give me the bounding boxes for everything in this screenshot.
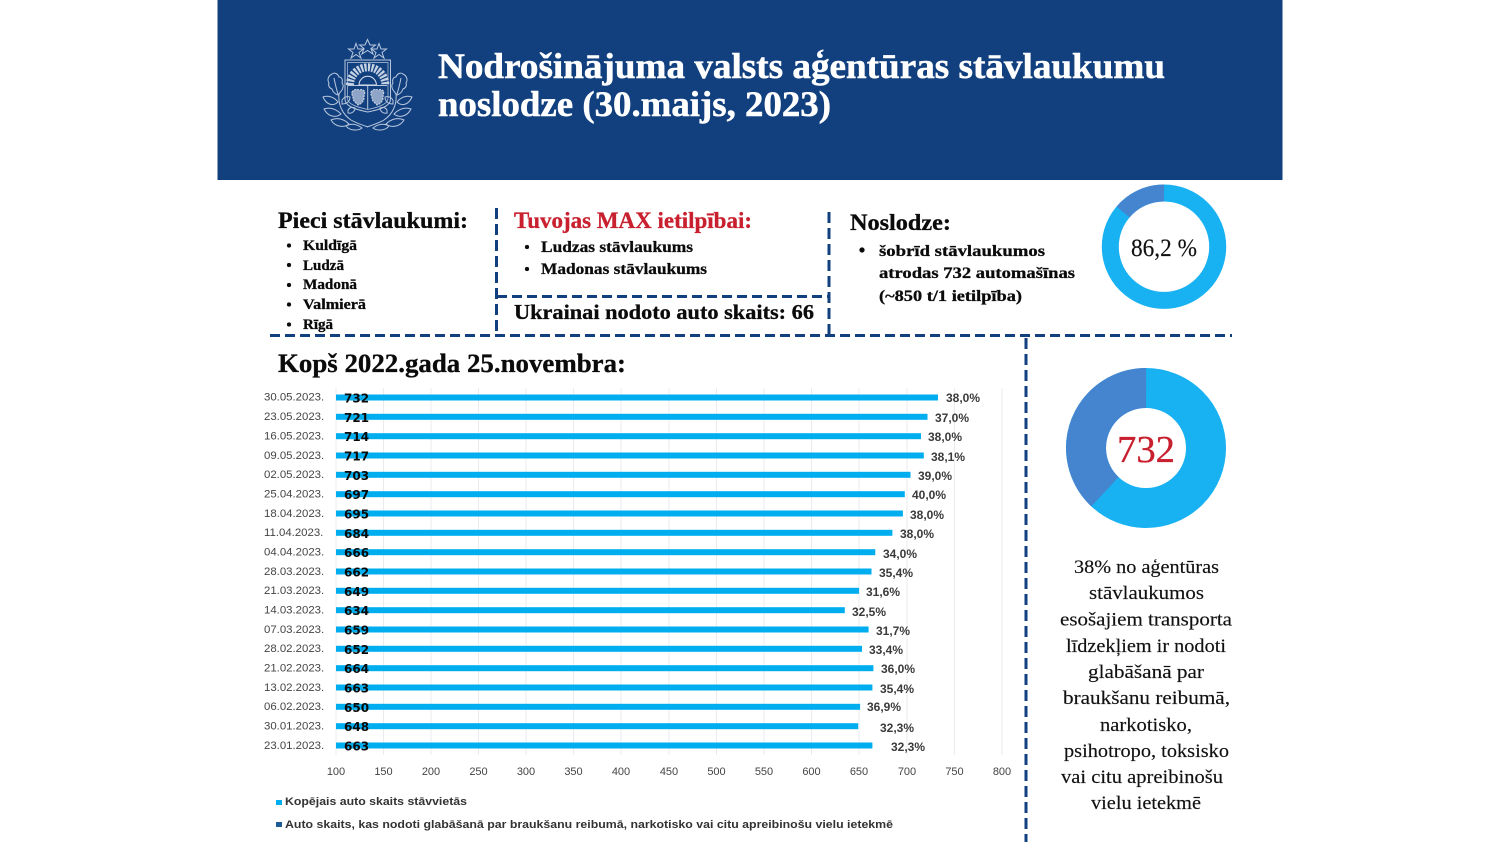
- bar chart: 650: [850, 766, 868, 778]
- chart legend: Auto skaits, kas nodoti glabāšanā par braukšanu reibumā, narkotisko vai citu apreibinošu vielu ietekmē: [285, 819, 893, 831]
- bar chart: 21.03.2023.: [264, 585, 324, 597]
- bar chart: 36,0%: [881, 662, 915, 676]
- bar chart: 663: [344, 740, 369, 754]
- bar chart: 11.04.2023.: [264, 527, 323, 539]
- bar chart: 662: [344, 566, 369, 580]
- bar chart: 664: [344, 662, 369, 676]
- donut chart: 86,2 %: 86,2 %: [1131, 235, 1197, 262]
- panel: approaching max capacity: Madonas stāvlaukums: [541, 261, 707, 278]
- bar chart: 648: [344, 720, 369, 734]
- bar chart: 28.02.2023.: [264, 643, 324, 655]
- text block: share of impaired driving cars: glabāšanā par: [1088, 663, 1204, 683]
- panel dividers: [270, 208, 1232, 842]
- bar chart: 600: [802, 766, 821, 778]
- bar chart: 13.02.2023.: [264, 682, 324, 694]
- bar chart: 500: [707, 766, 726, 778]
- bar chart: 25.04.2023.: [264, 488, 324, 500]
- bar chart: 09.05.2023.: [264, 450, 324, 462]
- bar chart: 200: [422, 766, 440, 778]
- title: Nodrošinājuma valsts aģentūras stāvlaukumu: [438, 46, 1165, 86]
- panel: five parking lots: Pieci stāvlaukumi:: [278, 208, 468, 233]
- panel: approaching max capacity: Ludzas stāvlaukums: [541, 239, 693, 256]
- bar chart: 700: [898, 766, 916, 778]
- text block: share of impaired driving cars: narkotisko,: [1100, 716, 1192, 736]
- bar chart: 35,4%: [879, 566, 913, 580]
- panel: five parking lots: Valmierā: [303, 297, 367, 313]
- bar chart: 37,0%: [935, 411, 969, 425]
- chart legend: Kopējais auto skaits stāvvietās: [285, 796, 467, 808]
- bar chart: 350: [564, 766, 583, 778]
- bar chart: 32,3%: [880, 721, 914, 735]
- bar chart: 16.05.2023.: [264, 430, 324, 442]
- bar chart: 38,0%: [946, 391, 980, 405]
- text block: share of impaired driving cars: esošajiem transporta: [1060, 610, 1232, 630]
- text block: share of impaired driving cars: psihotropo, toksisko: [1064, 742, 1229, 762]
- chart legend: [276, 796, 893, 831]
- text block: share of impaired driving cars: līdzekļiem ir nodoti: [1066, 637, 1226, 657]
- bar chart: 35,4%: [880, 682, 914, 696]
- bar chart: 23.01.2023.: [264, 740, 324, 752]
- bar chart: 695: [344, 508, 369, 522]
- panel: approaching max capacity: [514, 208, 752, 278]
- bar chart: 800: [993, 766, 1011, 778]
- bar chart: 100: [327, 766, 345, 778]
- bar chart: 36,9%: [867, 700, 901, 714]
- panel: occupancy: Noslodze:: [850, 210, 951, 235]
- bar chart: 02.05.2023.: [264, 469, 324, 481]
- bar chart: 33,4%: [869, 643, 903, 657]
- text block: share of impaired driving cars: [1060, 558, 1232, 814]
- bar chart: 38,0%: [928, 430, 962, 444]
- bar chart: 697: [344, 488, 369, 502]
- bar chart: 04.04.2023.: [264, 546, 324, 558]
- bar chart: 150: [374, 766, 393, 778]
- bar chart: 38,0%: [910, 508, 944, 522]
- header banner: [218, 0, 1282, 180]
- panel: five parking lots: Ludzā: [303, 258, 344, 274]
- bar chart: 30.01.2023.: [264, 720, 324, 732]
- bar chart: 07.03.2023.: [264, 624, 324, 636]
- bar chart: 39,0%: [918, 469, 952, 483]
- bar chart: 652: [344, 643, 369, 657]
- icon: Latvian coat of arms: [323, 40, 412, 130]
- bar chart: 450: [660, 766, 678, 778]
- chart heading: Kopš 2022.gada 25.novembra:: [278, 349, 626, 378]
- bar chart: 31,7%: [876, 624, 910, 638]
- donut chart: 732: [1061, 363, 1231, 533]
- title: [438, 46, 1165, 124]
- bar chart: [264, 388, 1011, 778]
- bar chart: 650: [344, 701, 369, 715]
- bar chart: 300: [517, 766, 535, 778]
- bar chart: 38,0%: [900, 527, 934, 541]
- bar chart: 38,1%: [931, 450, 965, 464]
- bar chart: 666: [344, 546, 369, 560]
- bar chart: 717: [344, 450, 369, 464]
- bar chart: 30.05.2023.: [264, 392, 324, 404]
- bar chart: 634: [344, 604, 369, 618]
- bar chart: 663: [344, 682, 369, 696]
- bar chart: 28.03.2023.: [264, 566, 324, 578]
- donut chart: 86,2 %: [1088, 171, 1240, 322]
- bar chart: 732: [344, 392, 369, 406]
- panel: occupancy: [850, 210, 1075, 305]
- text block: share of impaired driving cars: braukšanu reibumā,: [1063, 689, 1230, 709]
- panel: occupancy: šobrīd stāvlaukumos: [879, 243, 1045, 260]
- text block: share of impaired driving cars: stāvlaukumos: [1089, 584, 1204, 604]
- panel: five parking lots: Kuldīgā: [303, 238, 358, 254]
- panel: occupancy: atrodas 732 automašīnas: [879, 265, 1075, 282]
- text block: share of impaired driving cars: vai citu apreibinošu: [1061, 768, 1223, 788]
- text block: share of impaired driving cars: 38% no aģentūras: [1074, 558, 1219, 578]
- bar chart: 14.03.2023.: [264, 604, 324, 616]
- bar chart: 18.04.2023.: [264, 508, 324, 520]
- bar chart: 31,6%: [866, 585, 900, 599]
- bar chart: 32,5%: [852, 605, 886, 619]
- bar chart: 23.05.2023.: [264, 411, 324, 423]
- bar chart: 659: [344, 624, 369, 638]
- bar chart: 649: [344, 585, 369, 599]
- bar chart: 703: [344, 469, 369, 483]
- bar chart: 250: [469, 766, 488, 778]
- panel: five parking lots: Madonā: [303, 277, 358, 293]
- bar chart: 40,0%: [912, 488, 946, 502]
- bar chart: 34,0%: [883, 547, 917, 561]
- title: noslodze (30.maijs, 2023): [438, 84, 831, 124]
- bar chart: 684: [344, 527, 369, 541]
- bar chart: 721: [344, 411, 369, 425]
- text block: share of impaired driving cars: vielu ietekmē: [1091, 794, 1201, 814]
- bar chart: 06.02.2023.: [264, 701, 324, 713]
- bar chart: 714: [344, 430, 369, 444]
- bar chart: 750: [945, 766, 964, 778]
- panel: five parking lots: Rīgā: [303, 317, 334, 333]
- callout: cars handed to Ukraine: Ukrainai nodoto auto skaits: 66: [514, 300, 814, 324]
- bar chart: 550: [755, 766, 773, 778]
- bar chart: 400: [612, 766, 630, 778]
- bar chart: 21.02.2023.: [264, 662, 324, 674]
- panel: five parking lots: [278, 208, 468, 333]
- panel: occupancy: (~850 t/1 ietilpība): [879, 288, 1022, 305]
- panel: approaching max capacity: Tuvojas MAX ietilpībai:: [514, 208, 752, 233]
- donut chart: 732: 732: [1117, 429, 1175, 471]
- bar chart: 32,3%: [891, 740, 925, 754]
